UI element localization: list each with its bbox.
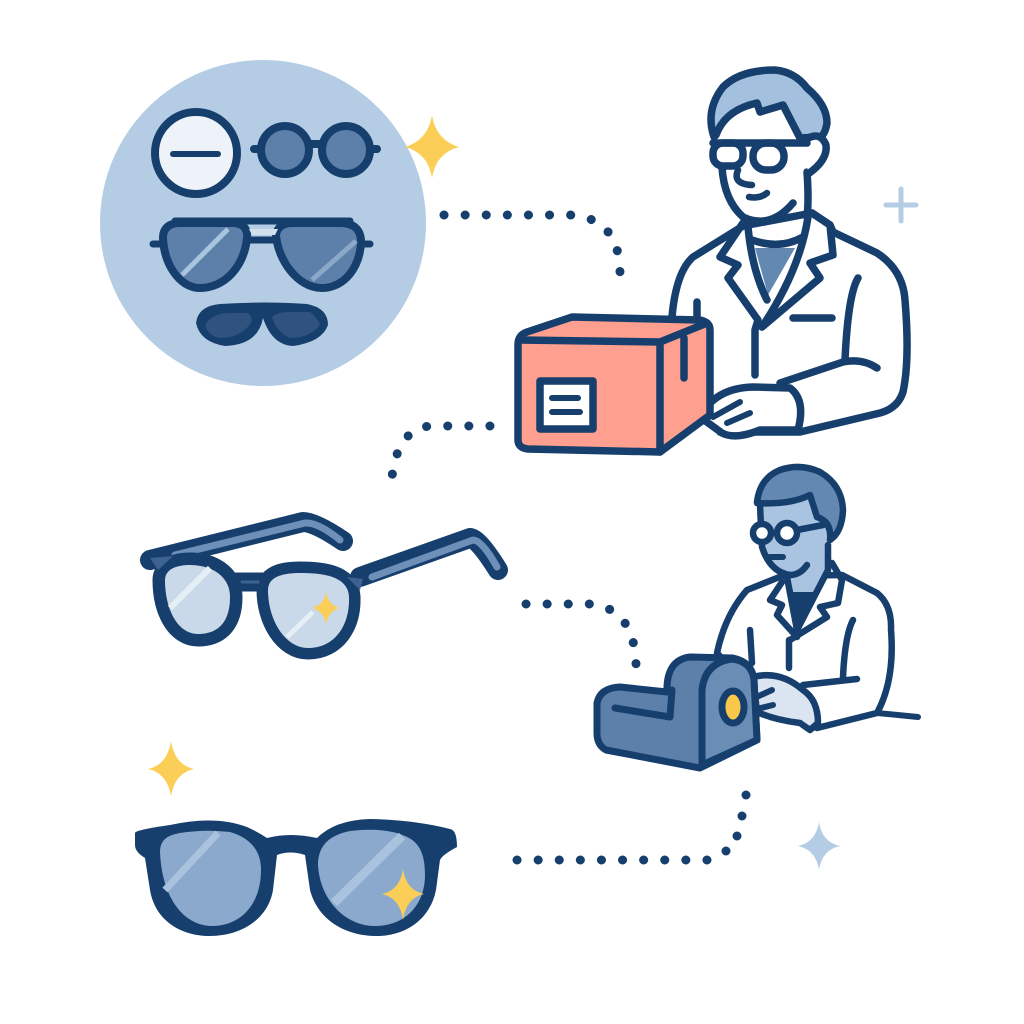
- icon: glasses with arms: [150, 522, 498, 648]
- coat edge above box: [693, 302, 701, 320]
- icon: light blue plus sparkle: [886, 189, 916, 221]
- face: [722, 95, 825, 220]
- icon: light blue sparkle: [798, 822, 840, 870]
- tie: [787, 590, 815, 630]
- glasses: [713, 143, 807, 170]
- hand: [753, 675, 818, 730]
- machine front: [702, 659, 757, 765]
- icon: minus badge: [155, 112, 237, 194]
- icon: small dark sunglasses: [196, 302, 328, 346]
- ear: [805, 136, 826, 174]
- box label: [540, 381, 593, 429]
- hair: [757, 467, 843, 540]
- coat: [717, 575, 892, 728]
- icon: scientist with box: [518, 70, 907, 452]
- coat: [672, 213, 907, 432]
- icon: finished sunglasses: [135, 819, 457, 936]
- lapels: [750, 563, 857, 685]
- nose and smile: [737, 170, 767, 198]
- icon: yellow sparkle top: [405, 115, 459, 178]
- knob: [722, 691, 744, 723]
- arrow: dotted path from machine to sunglasses: [517, 790, 750, 860]
- lapels: [720, 213, 858, 375]
- icon: technician at machine: [597, 467, 918, 768]
- icon: round glasses: [254, 126, 377, 174]
- nose: [770, 554, 783, 560]
- arrow: dotted path from circle to box: [444, 215, 620, 274]
- shirt: [755, 248, 795, 295]
- icon: aviator glasses: [153, 221, 370, 284]
- hand: [700, 387, 801, 436]
- table line: [877, 713, 918, 717]
- face outline: [760, 505, 828, 630]
- forearm: [780, 361, 877, 383]
- arrow: dotted path from glasses to machine: [526, 604, 636, 664]
- goggles: [753, 523, 823, 543]
- icon: yellow sparkle bottom left: [148, 741, 194, 796]
- machine: [597, 657, 757, 768]
- shirt neckline: [748, 217, 808, 327]
- arrow: dotted path from box to glasses: [391, 426, 490, 494]
- face and neck: [759, 495, 835, 592]
- panel: circle of eyewear options: [100, 60, 426, 386]
- box: [518, 317, 710, 452]
- face outline: [722, 167, 808, 221]
- hair: [711, 70, 827, 138]
